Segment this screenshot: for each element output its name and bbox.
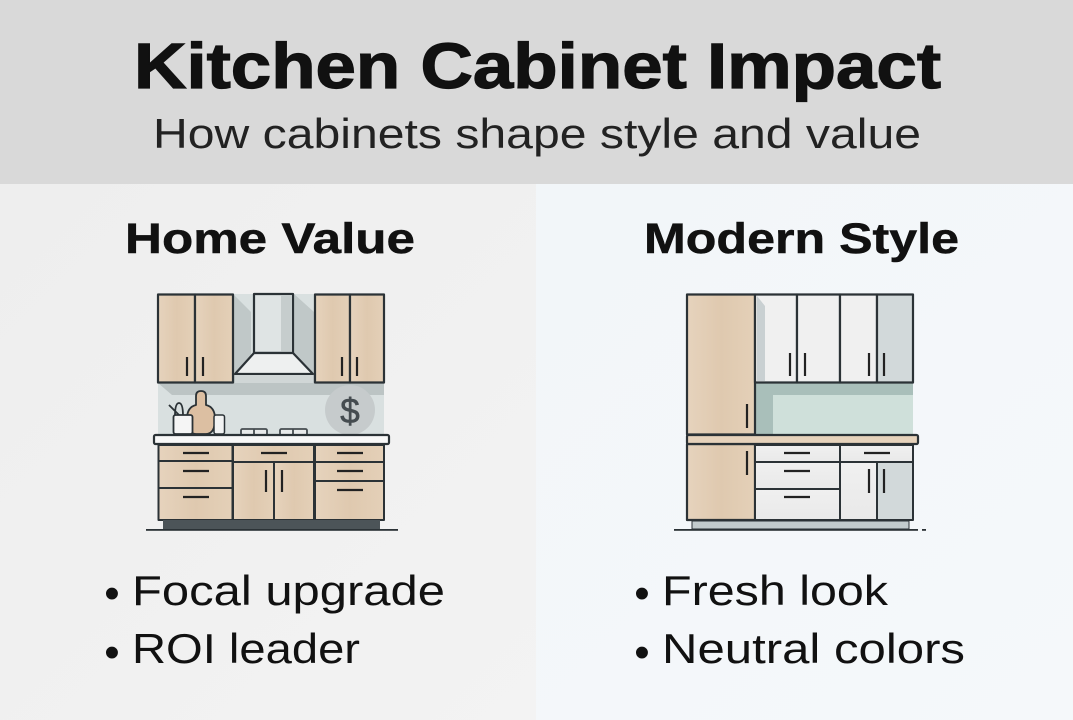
bullet list: modern style: Neutral colors: [662, 625, 965, 672]
backsplash: [755, 383, 913, 435]
icon: range hood: [235, 294, 313, 383]
icon: dollar badge: $: [340, 392, 360, 431]
countertop: [154, 435, 389, 444]
bullet list: modern style: •: [634, 628, 650, 677]
bullet list: modern style: •: [634, 569, 650, 618]
panel: header band: [0, 0, 1073, 184]
upper cabinet left: [158, 294, 233, 382]
icon: dollar badge: [325, 385, 375, 435]
base white cabinets: [755, 445, 913, 520]
bullet list: home value: •: [104, 628, 120, 677]
bullet list: home value: ROI leader: [132, 625, 360, 672]
base cabinets: [158, 445, 384, 520]
bullet list: modern style: [634, 567, 965, 677]
cabinet handles: [183, 357, 363, 497]
icon: cooktop burners: [241, 429, 307, 435]
upper white cabinets: [755, 294, 913, 382]
plinth and floor: [146, 520, 398, 531]
panel: modern style: [536, 184, 1073, 720]
tall wood cabinet: [687, 294, 755, 520]
illustration: kitchen with dollar sign: [146, 294, 398, 531]
bullet list: home value: Focal upgrade: [132, 567, 445, 614]
upper cabinet right: [315, 294, 384, 382]
title: Kitchen Cabinet Impact: [134, 30, 941, 102]
countertop: [687, 435, 918, 444]
icon: cutting board and utensils: [169, 391, 224, 434]
bullet list: modern style: Fresh look: [662, 567, 889, 614]
plinth and floor: [674, 521, 926, 531]
bullet list: home value: •: [104, 569, 120, 618]
panel: home value: [0, 184, 536, 720]
illustration: modern kitchen: [674, 294, 926, 531]
cabinet handles: [747, 353, 890, 497]
heading: modern style: Modern Style: [644, 215, 959, 263]
heading: home value: Home Value: [125, 215, 415, 263]
bullet list: home value: [104, 567, 445, 677]
subtitle: How cabinets shape style and value: [153, 110, 921, 157]
